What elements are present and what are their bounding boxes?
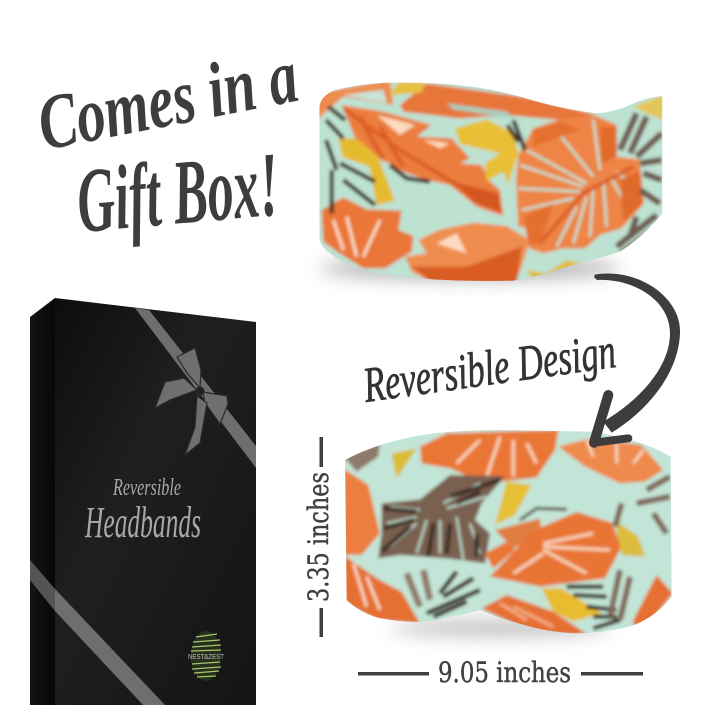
yellow flowers — [542, 588, 602, 622]
gift box — [30, 298, 256, 705]
box title: reversible headbands: Reversible — [112, 475, 181, 501]
long orange leaf — [342, 105, 503, 216]
top headband shadow — [320, 257, 620, 279]
arrow: top headband to bottom headband — [594, 274, 680, 443]
right palm fronds — [567, 587, 620, 628]
inner rim print — [317, 80, 393, 120]
heading: comes in a gift box: Comes in a — [31, 31, 304, 167]
box spine — [30, 298, 55, 705]
heading: comes in a gift box — [31, 31, 304, 252]
right front band — [497, 472, 672, 633]
dimension: width — [358, 656, 643, 689]
large orange leaf — [516, 116, 644, 253]
bottom headband shadow — [390, 621, 610, 635]
logo: nest and zest — [188, 631, 224, 681]
bottom centre orange leaf — [405, 223, 530, 283]
bow icon — [155, 348, 228, 455]
right orange leaf — [633, 575, 673, 630]
left orange leaves — [343, 468, 380, 555]
left front band — [345, 467, 540, 630]
bottom left orange leaf — [322, 197, 413, 268]
dimension: height: 3.35 inches — [302, 472, 335, 602]
lower brown palm frond — [407, 570, 430, 607]
twist orange leaf — [490, 512, 622, 587]
top ribbon — [135, 308, 256, 468]
logo: nest and zest: NEST&ZEST — [188, 652, 224, 661]
dimension: width: 9.05 inches — [438, 656, 571, 689]
yellow flowers — [455, 119, 518, 198]
spine ribbon — [30, 560, 55, 611]
inner back print — [420, 430, 558, 482]
lower orange leaf — [482, 595, 588, 635]
top headband — [313, 77, 667, 287]
dark palm fronds — [326, 107, 525, 213]
box front — [55, 298, 256, 705]
bottom ribbon — [55, 589, 165, 705]
bottom headband — [340, 427, 677, 640]
box title: reversible headbands: Headbands — [84, 498, 201, 547]
centre brown palm frond — [378, 475, 505, 563]
heading: comes in a gift box: Gift Box! — [73, 133, 283, 252]
box title: reversible headbands — [84, 475, 201, 547]
